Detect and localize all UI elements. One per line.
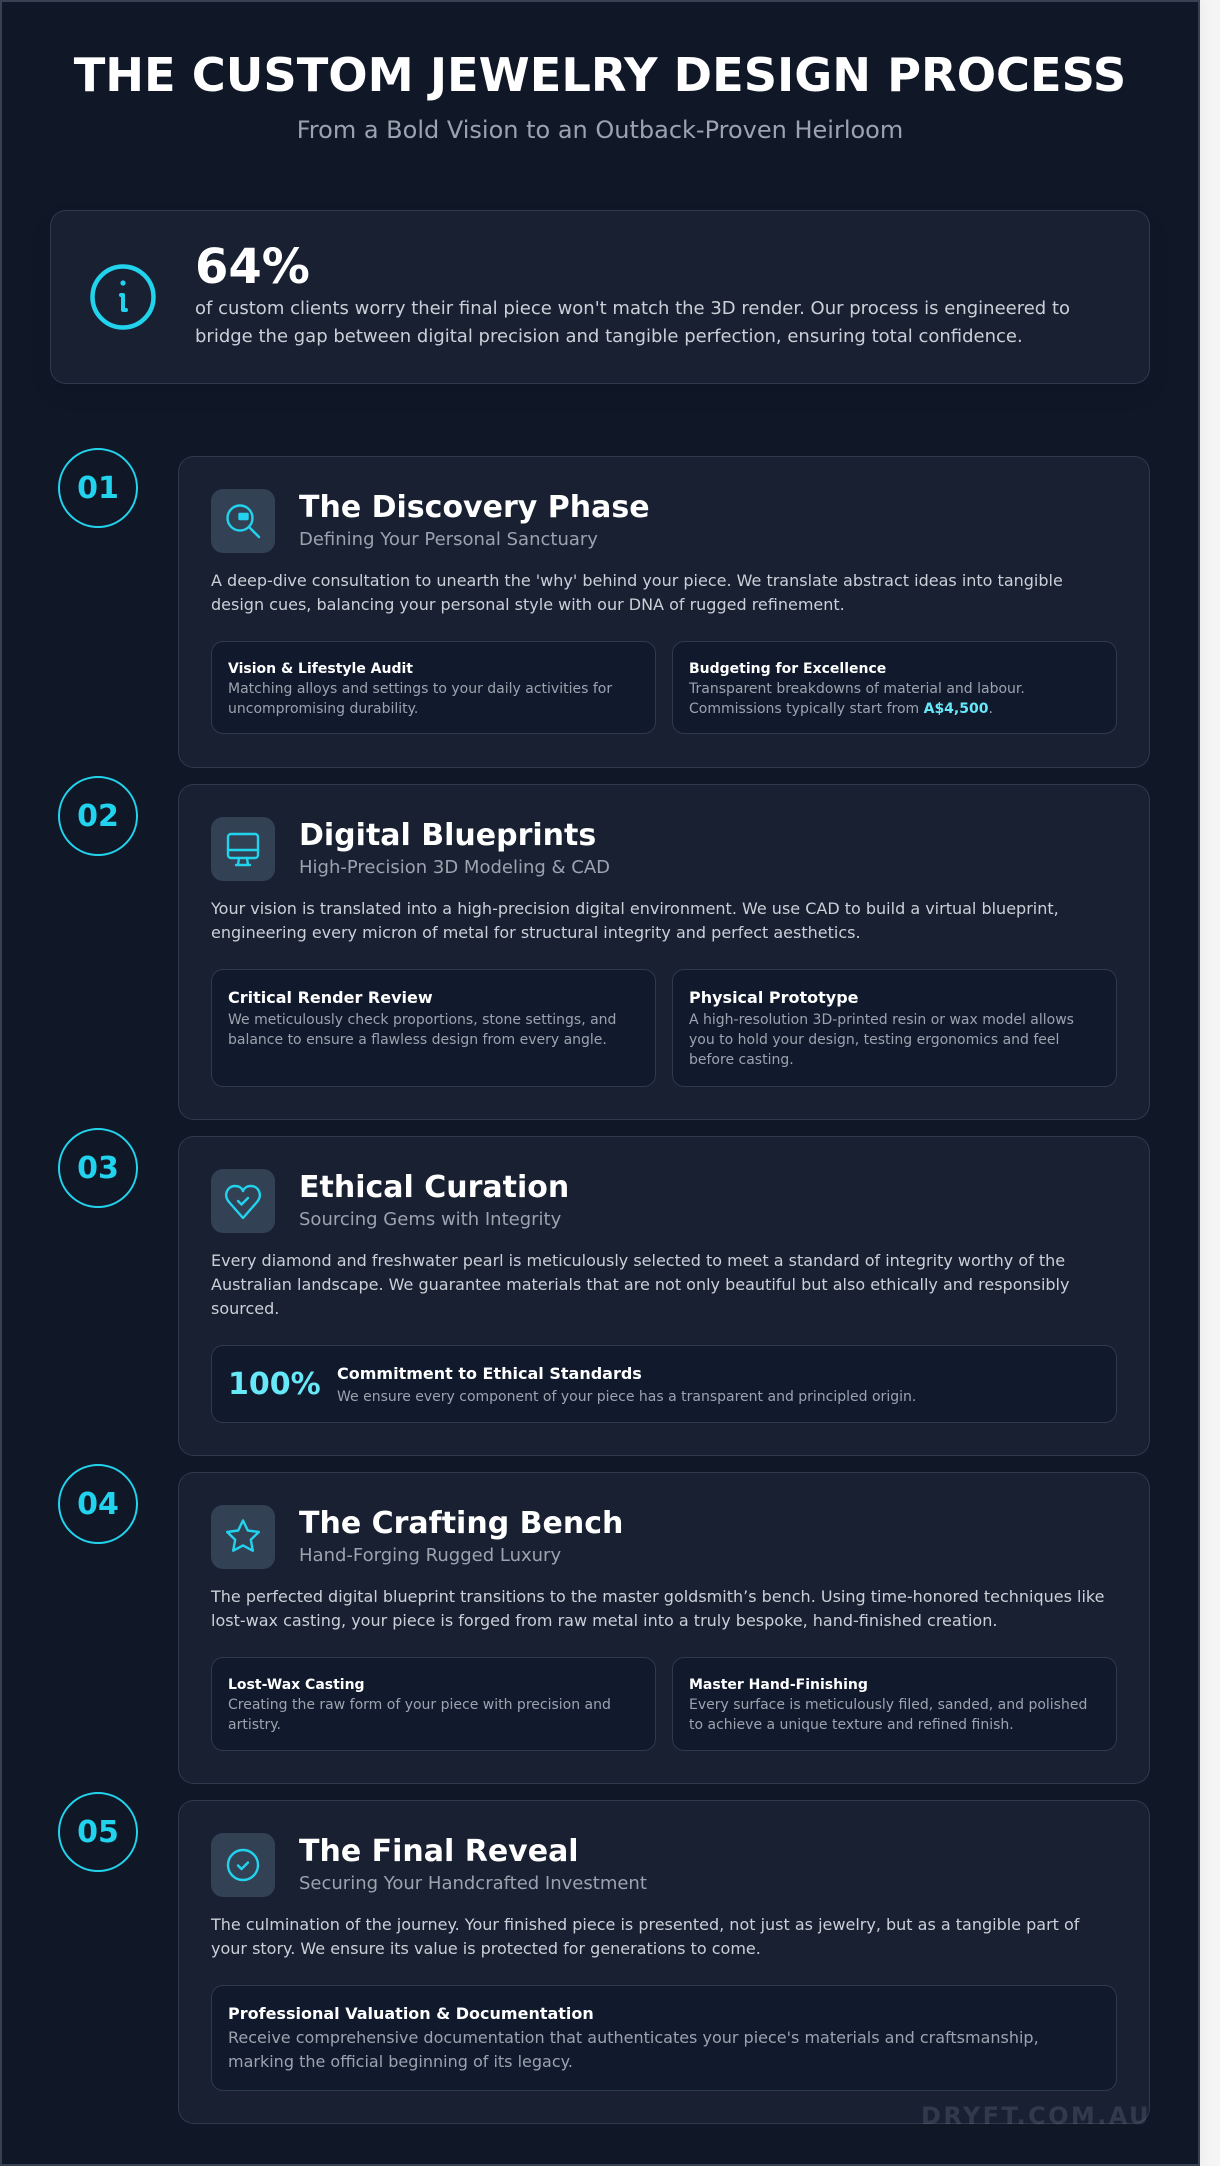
detail: critical render review: Critical Render Review (228, 988, 433, 1007)
panel: step 5 final reveal (178, 1800, 1150, 2124)
step number 05 (58, 1792, 138, 1872)
detail: valuation and documentation: Professional Valuation & Documentation (228, 2004, 594, 2023)
step number 01 (58, 448, 138, 528)
step description: Every diamond and freshwater pearl is meticulously selected to meet a standard of integrity worthy of the Australian landscape. We guarantee materials that are not only beautiful but also ethically and responsibly sourced. (211, 1251, 1069, 1318)
detail: budgeting: Transparent breakdowns of material and labour. Commissions typically start from A$4,500. (689, 681, 1025, 717)
step heading: Digital Blueprints (299, 818, 596, 853)
step subheading: Securing Your Handcrafted Investment (299, 1873, 647, 1894)
detail: critical render review (211, 969, 656, 1087)
step subheading: Defining Your Personal Sanctuary (299, 529, 598, 550)
step description: The perfected digital blueprint transitions to the master goldsmith’s bench. Using time-honored techniques like lost-wax casting, your piece is forged from raw metal into a truly bespoke, hand-finished creation. (211, 1587, 1104, 1630)
detail: lost-wax casting (211, 1657, 656, 1751)
step number 04: 04 (77, 1487, 119, 1522)
detail: budgeting: Budgeting for Excellence (689, 661, 886, 677)
statistic: 100% (228, 1367, 321, 1402)
detail: physical prototype: A high-resolution 3D-printed resin or wax model allows you to hold your design, testing ergonomics and feel before casting. (689, 1012, 1074, 1068)
step number 04 (58, 1464, 138, 1544)
panel: 64% statistic callout (50, 210, 1150, 384)
statistic: 64% (195, 239, 310, 295)
detail: master hand-finishing: Every surface is meticulously filed, sanded, and polished to achieve a unique texture and refined finish. (689, 1697, 1087, 1733)
detail: physical prototype: Physical Prototype (689, 988, 859, 1007)
icon: star (211, 1505, 275, 1569)
detail: lost-wax casting: Creating the raw form of your piece with precision and artistry. (228, 1697, 611, 1733)
panel: step 3 ethical curation (178, 1136, 1150, 1456)
step heading: Ethical Curation (299, 1170, 569, 1205)
detail: vision and lifestyle audit (211, 641, 656, 734)
step heading: The Final Reveal (299, 1834, 579, 1869)
step number 03: 03 (77, 1151, 119, 1186)
icon: heart with check (211, 1169, 275, 1233)
detail: critical render review: We meticulously check proportions, stone settings, and balance to ensure a flawless design from every angle. (228, 1012, 616, 1048)
detail heading: Commitment to Ethical Standards (337, 1364, 642, 1383)
detail: physical prototype (672, 969, 1117, 1087)
detail: vision and lifestyle audit: Vision & Lifestyle Audit (228, 661, 413, 677)
detail: master hand-finishing (672, 1657, 1117, 1751)
step description: A deep-dive consultation to unearth the 'why' behind your piece. We translate abstract ideas into tangible design cues, balancing your personal style with our DNA of rugged refinement. (211, 571, 1063, 614)
icon: magnifier (211, 489, 275, 553)
step description: The culmination of the journey. Your finished piece is presented, not just as jewelry, but as a tangible part of your story. We ensure its value is protected for generations to come. (211, 1915, 1079, 1958)
step subheading: High-Precision 3D Modeling & CAD (299, 857, 610, 878)
step subheading: Hand-Forging Rugged Luxury (299, 1545, 561, 1566)
detail: 100% commitment (211, 1345, 1117, 1423)
step number 01: 01 (77, 471, 119, 506)
panel: step 4 crafting bench (178, 1472, 1150, 1784)
step heading: The Discovery Phase (299, 490, 650, 525)
detail text: We ensure every component of your piece has a transparent and principled origin. (337, 1389, 916, 1405)
detail: lost-wax casting: Lost-Wax Casting (228, 1677, 365, 1693)
detail: master hand-finishing: Master Hand-Finishing (689, 1677, 868, 1693)
step number 02 (58, 776, 138, 856)
panel: step 1 discovery phase (178, 456, 1150, 768)
step subheading: Sourcing Gems with Integrity (299, 1209, 561, 1230)
statistic description: of custom clients worry their final piece won't match the 3D render. Our process is engineered to bridge the gap between digital precision and tangible perfection, ensuring total confidence. (195, 298, 1070, 347)
icon: check circle (211, 1833, 275, 1897)
step heading: The Crafting Bench (299, 1506, 623, 1541)
detail: vision and lifestyle audit: Matching alloys and settings to your daily activities for uncompromising durability. (228, 681, 612, 717)
title: THE CUSTOM JEWELRY DESIGN PROCESS (74, 48, 1126, 102)
watermark: DRYFT.COM.AU (921, 2102, 1151, 2130)
step number 05: 05 (77, 1815, 119, 1850)
step description: Your vision is translated into a high-precision digital environment. We use CAD to build a virtual blueprint, engineering every micron of metal for structural integrity and perfect aesthetics. (211, 899, 1059, 942)
step number 03 (58, 1128, 138, 1208)
detail: valuation and documentation (211, 1985, 1117, 2091)
icon: monitor (211, 817, 275, 881)
detail: valuation and documentation: Receive comprehensive documentation that authenticates your piece's materials and craftsmanship, marking the official beginning of its legacy. (228, 2028, 1039, 2071)
icon: info (90, 264, 156, 330)
detail: budgeting (672, 641, 1117, 734)
step number 02: 02 (77, 799, 119, 834)
subtitle: From a Bold Vision to an Outback-Proven Heirloom (297, 116, 903, 144)
panel: step 2 digital blueprints (178, 784, 1150, 1120)
